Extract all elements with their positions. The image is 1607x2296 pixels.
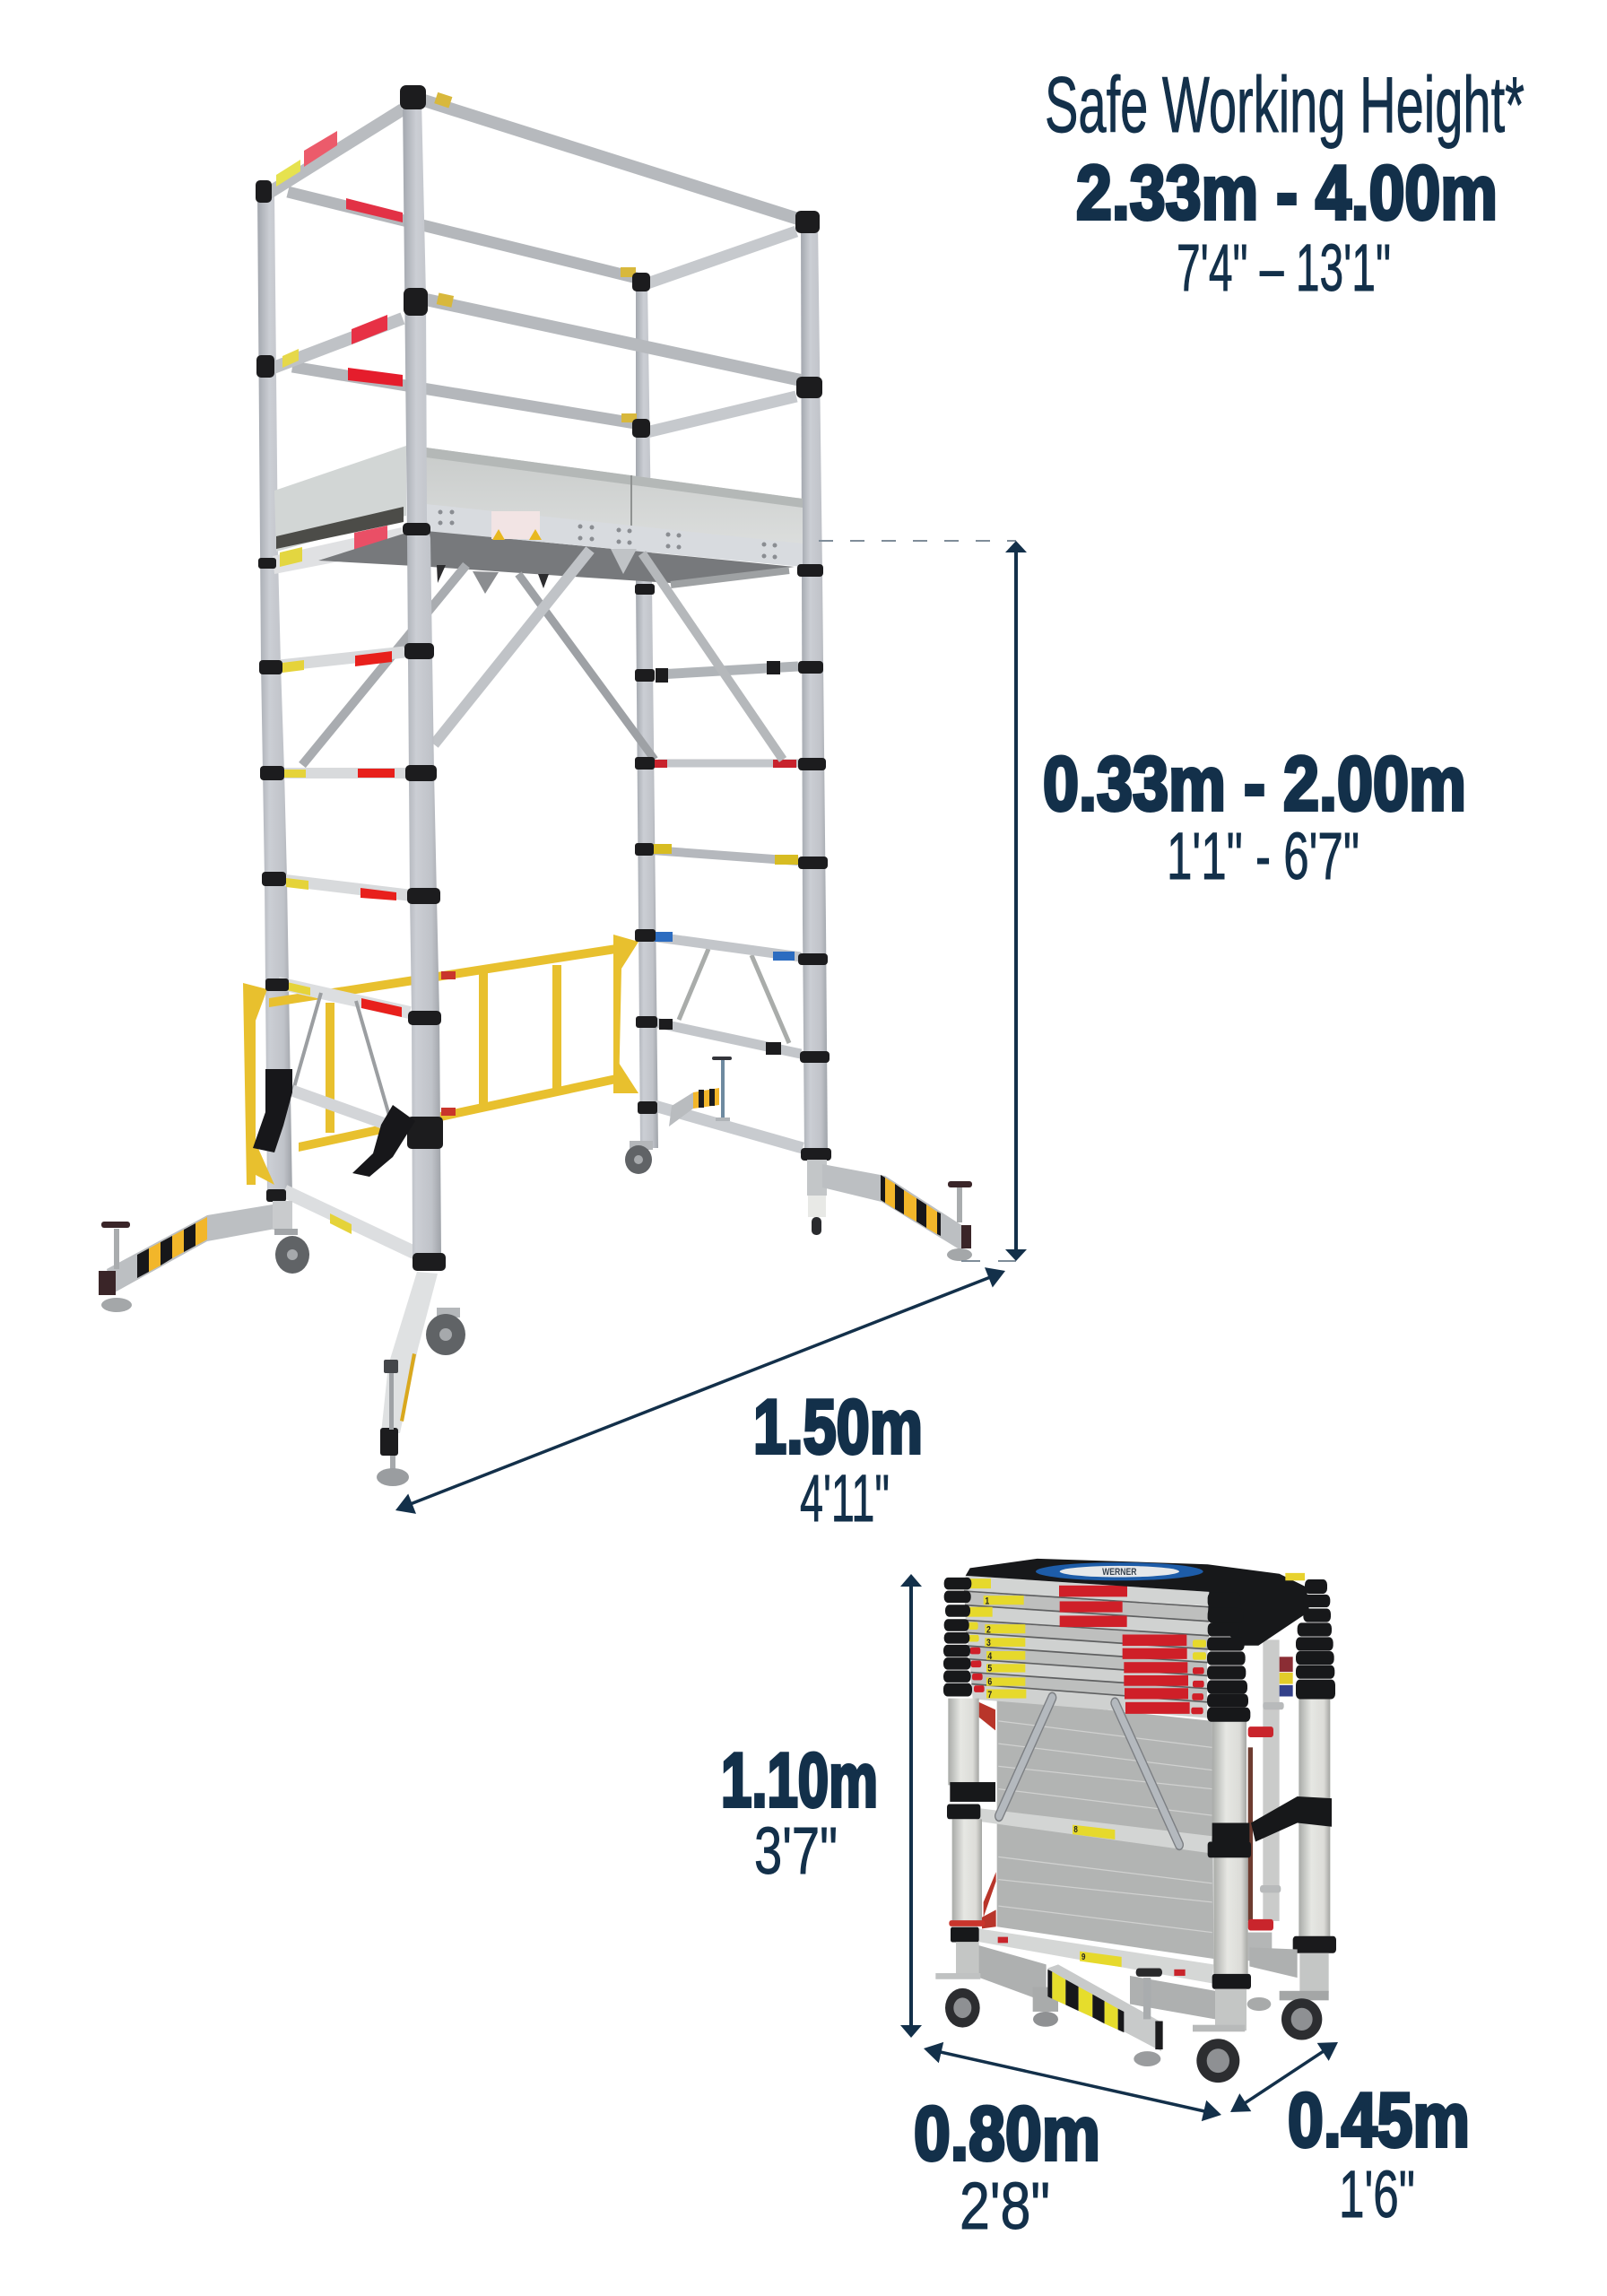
folding braces [999, 1698, 1179, 1845]
value: platform height imperial: 1'1" - 6'7" [1167, 819, 1359, 893]
deck side rail [273, 507, 404, 574]
front outrigger foot [377, 1272, 438, 1486]
yellow safety gate [243, 935, 638, 1185]
left rear caster wheel [273, 1201, 309, 1274]
base frame [973, 1944, 1298, 2027]
far right post and caster [1280, 1699, 1336, 2040]
upper front guardrails [424, 92, 801, 422]
left ladder rungs [272, 651, 415, 1253]
scaffold tower illustration [99, 85, 972, 1486]
upper side guardrails [265, 109, 403, 370]
dimension arrow: folded height [900, 1574, 922, 2038]
rung gaps [964, 1591, 1209, 1702]
value: folded depth imperial: 1'6" [1339, 2157, 1415, 2231]
ratchet straps [253, 1069, 415, 1177]
deck beam [426, 504, 803, 567]
left post [935, 1699, 995, 2028]
far column and hardware [1248, 1639, 1293, 1961]
red stickers [970, 1586, 1204, 1714]
black clamps [256, 85, 831, 1271]
striped outrigger arm [1047, 1964, 1163, 2066]
value: working height metric: 2.33m - 4.00m [1076, 151, 1498, 236]
diagonal braces [302, 550, 783, 765]
value: folded height imperial: 3'7" [754, 1813, 838, 1888]
back right post [636, 281, 658, 1148]
front right post [1193, 1721, 1332, 2083]
mid rung: 8 [1073, 1824, 1078, 1834]
deck triangle bracket [611, 549, 637, 574]
bottom rung: 9 [1081, 1952, 1085, 1961]
value: folded width imperial: 2'8" [960, 2169, 1050, 2243]
rung numbers: 6 [987, 1677, 993, 1688]
dimension arrow: folded width [924, 2042, 1221, 2121]
rear red braces [979, 1702, 996, 1928]
rung numbers: 7 [987, 1690, 993, 1700]
left outrigger foot [99, 1204, 278, 1312]
value: folded width metric: 0.80m [914, 2092, 1100, 2177]
aluminium platform board [997, 1699, 1213, 1959]
mid rung [975, 1808, 1212, 1853]
rung numbers: 2 [986, 1625, 991, 1636]
rung numbers: 4 [987, 1651, 993, 1662]
front right post [801, 221, 828, 1157]
rung numbers: 3 [986, 1638, 991, 1648]
deck side panel [274, 446, 406, 552]
upper back guardrails [288, 192, 796, 432]
dimension arrow: tower length [395, 1267, 1005, 1514]
dimension arrow: platform height [819, 541, 1027, 1261]
canvas cover with logo [966, 1559, 1309, 1646]
rung numbers: 1 [985, 1596, 990, 1607]
back left caster wheel [625, 1141, 653, 1174]
right ladder rungs [649, 661, 803, 1148]
value: folded height metric: 1.10m [721, 1738, 878, 1823]
value: length metric: 1.50m [753, 1385, 923, 1470]
front caster wheel [426, 1308, 465, 1355]
deck rivets [438, 509, 777, 560]
value: folded depth metric: 0.45m [1288, 2078, 1470, 2163]
deck warning label [491, 511, 542, 540]
value: platform height metric: 0.33m - 2.00m [1043, 742, 1466, 827]
value: working height imperial: 7'4" – 13'1" [1177, 230, 1391, 305]
folded scaffold illustration [935, 1559, 1336, 2083]
black clamp stacks [943, 1578, 1335, 1722]
canvas cover with logo: WERNER [1102, 1567, 1137, 1578]
dimension arrow: folded depth [1230, 2042, 1338, 2112]
front left main post [403, 99, 441, 1256]
value: length imperial: 4'11" [800, 1461, 890, 1535]
back left post [257, 192, 292, 1197]
gate connectors [441, 971, 456, 1116]
yellow stickers [967, 1578, 1206, 1699]
rung numbers: 5 [987, 1664, 993, 1674]
front deck board [426, 448, 803, 547]
underside of deck [318, 531, 795, 594]
rung numbers [985, 1596, 993, 1700]
bottom rung [979, 1928, 1213, 1983]
right outrigger foot [807, 1160, 972, 1261]
stacked ladder rungs with labels [964, 1576, 1209, 1718]
